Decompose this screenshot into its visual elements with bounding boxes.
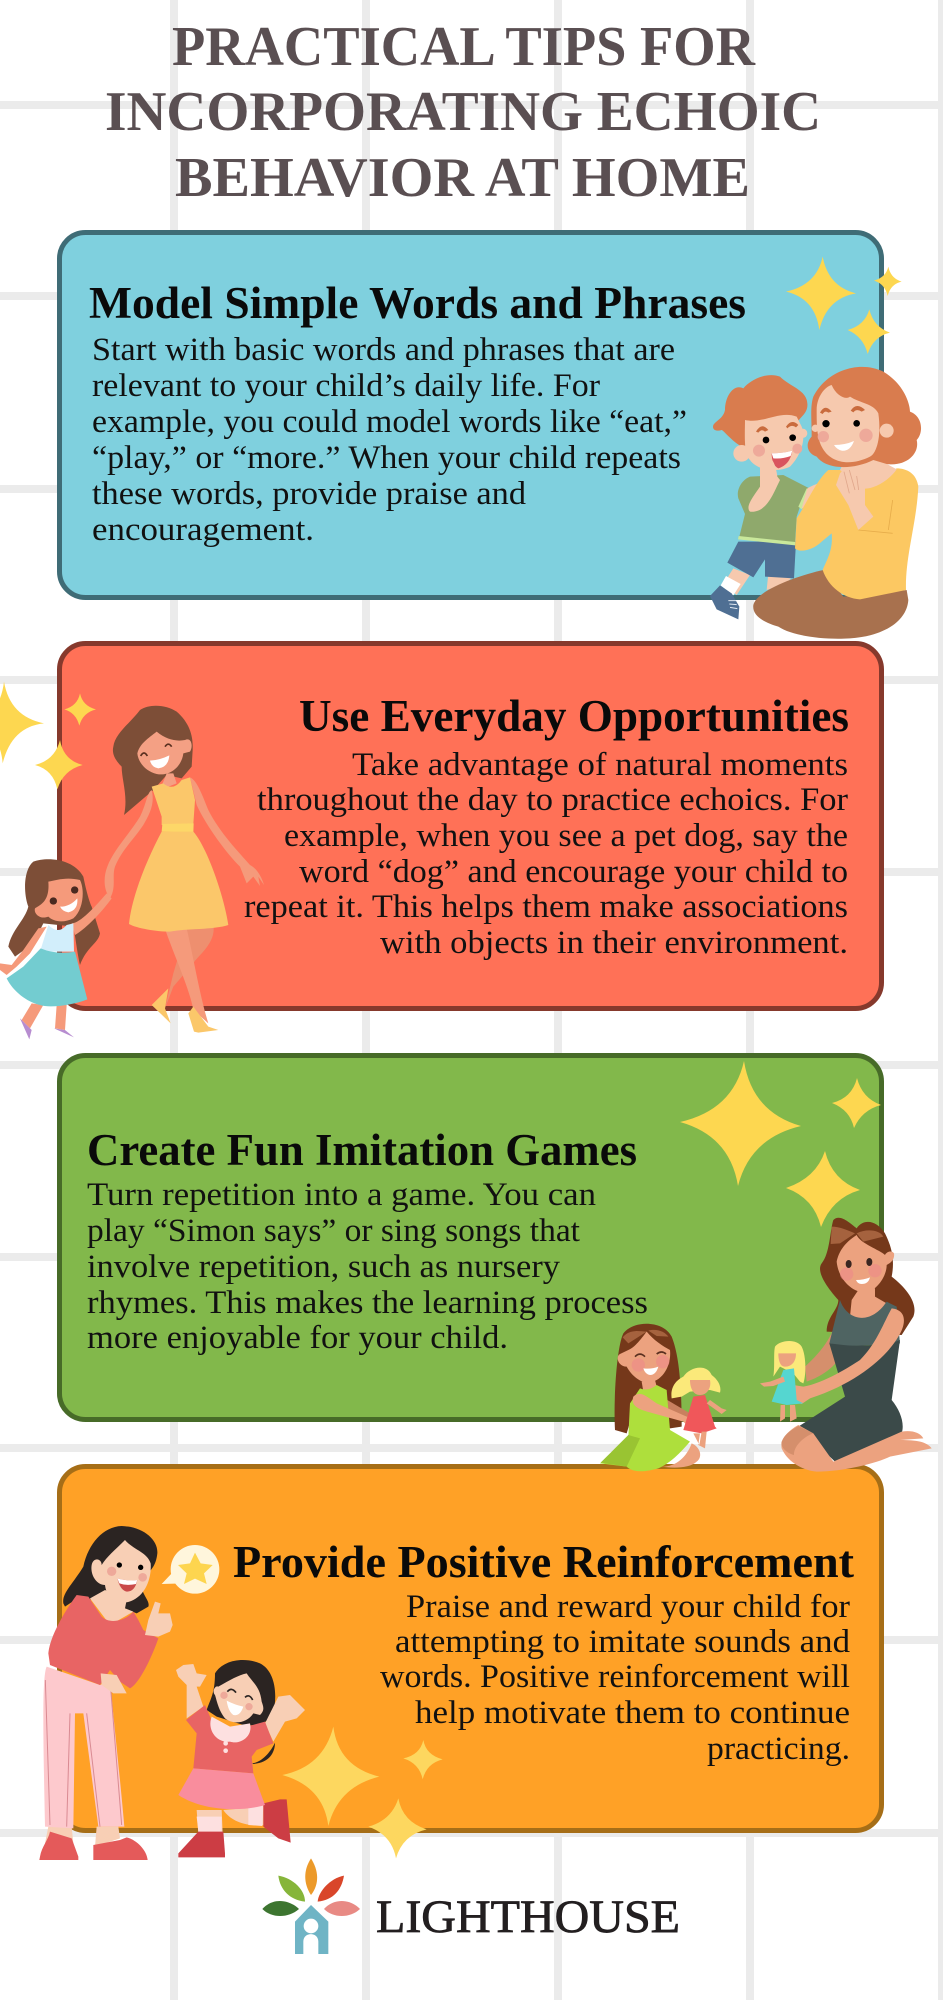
illustration: mother and daughter playing with dolls xyxy=(600,1061,932,1472)
body text: everyday opportunities: example, when you see a pet dog, say the xyxy=(284,818,848,854)
body text: imitation games: play “Simon says” or sing songs that xyxy=(87,1213,580,1249)
illustration: mother and daughter walking with sparkles xyxy=(0,682,264,1039)
title: BEHAVIOR AT HOME xyxy=(175,147,750,209)
title: PRACTICAL TIPS FOR xyxy=(172,16,756,78)
body text: model simple words: relevant to your child’s daily life. For xyxy=(92,368,600,404)
body text: positive reinforcement: Praise and reward your child for xyxy=(406,1589,850,1625)
title: INCORPORATING ECHOIC xyxy=(105,81,821,143)
panel: model simple words and phrases xyxy=(60,232,882,598)
logo: lighthouse xyxy=(262,1858,680,1954)
figure: jumping girl xyxy=(176,1660,305,1857)
icon: leaves and house xyxy=(262,1858,360,1954)
body text: positive reinforcement: practicing. xyxy=(707,1731,850,1767)
body text: everyday opportunities xyxy=(244,747,848,961)
illustration: mother thumbs up and jumping girl xyxy=(39,1526,443,1860)
figure: boy xyxy=(710,375,823,619)
body text: everyday opportunities: throughout the day to practice echoics. For xyxy=(257,782,848,818)
panel: create fun imitation games xyxy=(60,1056,882,1420)
body text: model simple words: Start with basic words and phrases that are xyxy=(92,332,675,368)
figure: daughter in blue dress xyxy=(0,859,112,1039)
heading: model simple words: Model Simple Words and Phrases xyxy=(89,278,746,328)
figure: mother in dark dress xyxy=(781,1218,932,1472)
panel: use everyday opportunities xyxy=(60,644,882,1008)
body text: positive reinforcement xyxy=(380,1589,851,1767)
heading: everyday opportunities: Use Everyday Opportunities xyxy=(299,691,849,741)
icon: sparkles panel 1 xyxy=(786,257,902,354)
figure: mother in yellow dress xyxy=(105,706,264,1033)
body text: positive reinforcement: attempting to imitate sounds and xyxy=(395,1624,851,1660)
icon: sparkles panel 4 xyxy=(282,1727,443,1858)
figure: woman in red top xyxy=(39,1526,173,1860)
body text: everyday opportunities: with objects in their environment. xyxy=(380,925,848,961)
body text: model simple words: example, you could model words like “eat,” xyxy=(92,404,687,440)
panel: provide positive reinforcement xyxy=(60,1466,882,1830)
icon: sparkles panel 3 xyxy=(680,1061,881,1227)
icon: blonde doll in teal xyxy=(760,1341,805,1422)
figure: mother xyxy=(753,367,921,639)
body text: everyday opportunities: word “dog” and encourage your child to xyxy=(299,854,848,890)
body text: positive reinforcement: help motivate them to continue xyxy=(415,1695,850,1731)
logo wordmark: LIGHTHOUSE xyxy=(376,1891,680,1943)
body text: everyday opportunities: repeat it. This helps them make associations xyxy=(244,889,848,925)
heading: imitation games: Create Fun Imitation Games xyxy=(87,1125,637,1175)
body text: model simple words: encouragement. xyxy=(92,512,314,548)
body text: imitation games xyxy=(87,1177,648,1356)
icon: sparkles panel 2 xyxy=(0,682,96,789)
body text: positive reinforcement: words. Positive reinforcement will xyxy=(380,1659,850,1695)
heading: positive reinforcement: Provide Positive Reinforcement xyxy=(233,1537,854,1587)
body text: imitation games: involve repetition, such as nursery xyxy=(87,1249,561,1285)
icon: speech bubble with star xyxy=(162,1545,219,1594)
title xyxy=(105,16,821,209)
body text: model simple words: these words, provide praise and xyxy=(92,476,527,512)
icon: blonde doll in red xyxy=(671,1368,727,1448)
illustration: mother and boy with sparkles xyxy=(710,257,921,639)
body text: imitation games: more enjoyable for your child. xyxy=(87,1320,508,1356)
body text: imitation games: rhymes. This makes the learning process xyxy=(87,1285,648,1321)
figure: girl in green dress xyxy=(600,1324,702,1471)
body text: model simple words: “play,” or “more.” When your child repeats xyxy=(92,440,681,476)
body text: model simple words xyxy=(92,332,687,548)
body text: everyday opportunities: Take advantage of natural moments xyxy=(352,747,848,783)
body text: imitation games: Turn repetition into a game. You can xyxy=(87,1177,596,1213)
